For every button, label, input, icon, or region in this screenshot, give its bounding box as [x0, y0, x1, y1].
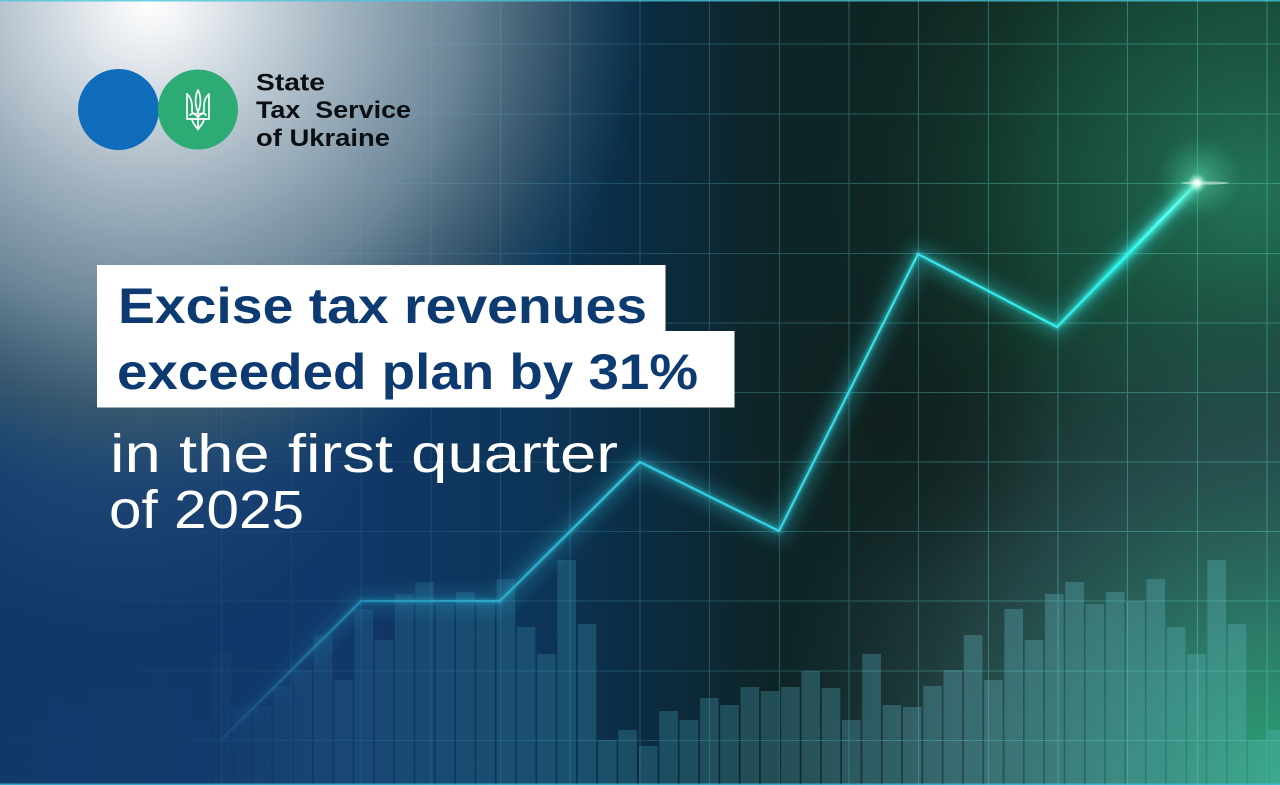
bar chart [0, 560, 1280, 785]
headline: exceeded plan by 31% [117, 344, 698, 400]
subheading: in the first quarter [110, 424, 618, 484]
logo text: State [256, 70, 325, 96]
logo text [256, 70, 411, 152]
glowing trend line [221, 183, 1197, 740]
subheading [109, 424, 618, 540]
headline: Excise tax revenues [118, 278, 647, 334]
logo text: Tax Service [256, 97, 411, 124]
headline [97, 265, 734, 408]
logo text: of Ukraine [256, 125, 390, 152]
logo blue circle [78, 69, 159, 150]
subheading: of 2025 [109, 480, 304, 540]
logo green circle with trident [158, 70, 238, 150]
sparkle at line end [1158, 136, 1242, 220]
